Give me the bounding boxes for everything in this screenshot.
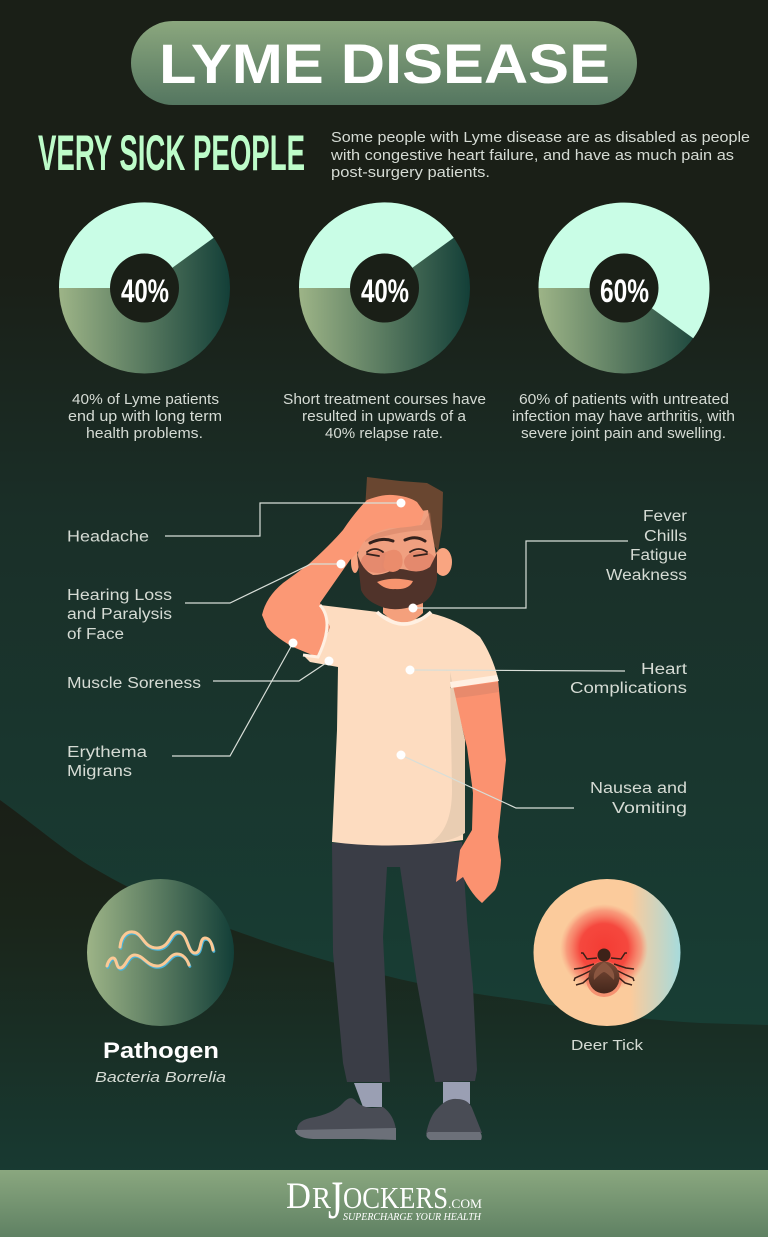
pathogen heading: Pathogen (103, 1038, 219, 1063)
pants (332, 842, 477, 1082)
cheeks (361, 551, 436, 573)
pie chart 1: 40% (59, 202, 230, 374)
pie caption 1: health problems. (86, 426, 203, 442)
ears (351, 548, 452, 576)
right arm and hand (452, 680, 506, 903)
shirt (303, 605, 498, 846)
sleeve trim (303, 605, 327, 657)
pie caption 1: 40% of Lyme patients (72, 392, 219, 408)
logo: drjockers: SUPERCHARGE YOUR HEALTH (343, 1212, 482, 1223)
icon: deer tick circle (534, 879, 680, 1026)
leader lines and dots (165, 498, 628, 808)
intro text (330, 130, 750, 181)
label: heart complications: Complications (570, 680, 687, 697)
pie chart 3: 60% (538, 202, 710, 374)
dark lower wave (0, 800, 768, 1175)
label: nausea and vomiting (590, 780, 687, 817)
footer band (0, 1170, 768, 1237)
pie caption 3: severe joint pain and swelling. (521, 426, 726, 442)
right shoe (426, 1099, 482, 1140)
pie caption 2: resulted in upwards of a (302, 409, 467, 425)
pie chart 3: 60%: 60% (600, 273, 649, 309)
face (358, 510, 437, 590)
label: heart complications (570, 661, 688, 697)
pie caption 2: 40% relapse rate. (325, 426, 443, 442)
heading: very sick people: VERY SICK PEOPLE (38, 125, 305, 181)
pie caption 2 (283, 392, 486, 442)
intro text: with congestive heart failure, and have as much pain as (330, 148, 734, 164)
nose (383, 550, 403, 572)
label: fever chills fatigue weakness: Chills (644, 528, 687, 545)
label: nausea and vomiting: Nausea and (590, 780, 687, 797)
logo: drjockers: R (312, 1180, 331, 1215)
socks (354, 1082, 470, 1107)
label: fever chills fatigue weakness: Weakness (606, 567, 687, 584)
label: fever chills fatigue weakness: Fatigue (630, 547, 687, 564)
label: hearing loss: Hearing Loss (67, 587, 172, 604)
label: erythema migrans: Erythema (67, 744, 147, 761)
arm cuff shadow (453, 682, 499, 698)
title pill (131, 21, 637, 105)
raised arm and hand (262, 495, 424, 657)
logo: drjockers: J (328, 1170, 343, 1230)
pie caption 1 (68, 392, 222, 442)
beard (357, 553, 437, 609)
pie chart 1: 40%: 40% (121, 273, 169, 309)
illustration: sick man (262, 477, 506, 1140)
shadow under hand (365, 512, 432, 542)
pie caption 3: 60% of patients with untreated (519, 392, 729, 408)
label: fever chills fatigue weakness: Fever (643, 508, 687, 525)
icon: pathogen circle (87, 879, 234, 1026)
label: muscle soreness: Muscle Soreness (67, 675, 201, 692)
logo: drjockers: .COM (448, 1196, 482, 1211)
label: headache: Headache (67, 528, 149, 546)
pie chart 2: 40% (299, 202, 470, 374)
logo: drjockers: OCKERS (343, 1180, 448, 1215)
deer tick label: Deer Tick (571, 1037, 644, 1054)
left shoe (295, 1098, 396, 1140)
pie caption 2: Short treatment courses have (283, 392, 486, 408)
pie caption 3: infection may have arthritis, with (512, 409, 735, 425)
intro text: Some people with Lyme disease are as disabled as people (331, 130, 750, 146)
label: heart complications: Heart (641, 661, 688, 678)
label: erythema migrans: Migrans (67, 763, 132, 780)
title pill: LYME DISEASE (159, 32, 610, 95)
neck (383, 598, 423, 622)
label: hearing loss: and Paralysis (67, 606, 172, 623)
logo: drjockers: D (286, 1176, 311, 1217)
label: hearing loss (67, 587, 172, 643)
label: nausea and vomiting: Vomiting (612, 800, 687, 817)
shirt shade (430, 672, 465, 843)
mouth (377, 579, 413, 589)
hair (365, 477, 443, 552)
label: hearing loss: of Face (67, 626, 124, 643)
pathogen subtitle: Bacteria Borrelia (95, 1070, 226, 1086)
intro text: post-surgery patients. (331, 165, 490, 181)
label: erythema migrans (67, 744, 147, 780)
pie chart 2: 40%: 40% (361, 273, 409, 309)
sleeve cuff (450, 675, 499, 688)
eyes and brows (367, 538, 427, 556)
label: fever chills fatigue weakness (606, 508, 687, 584)
logo: drjockers (286, 1170, 482, 1230)
collar (377, 612, 431, 624)
pie caption 1: end up with long term (68, 409, 222, 425)
pie caption 3 (512, 392, 735, 442)
